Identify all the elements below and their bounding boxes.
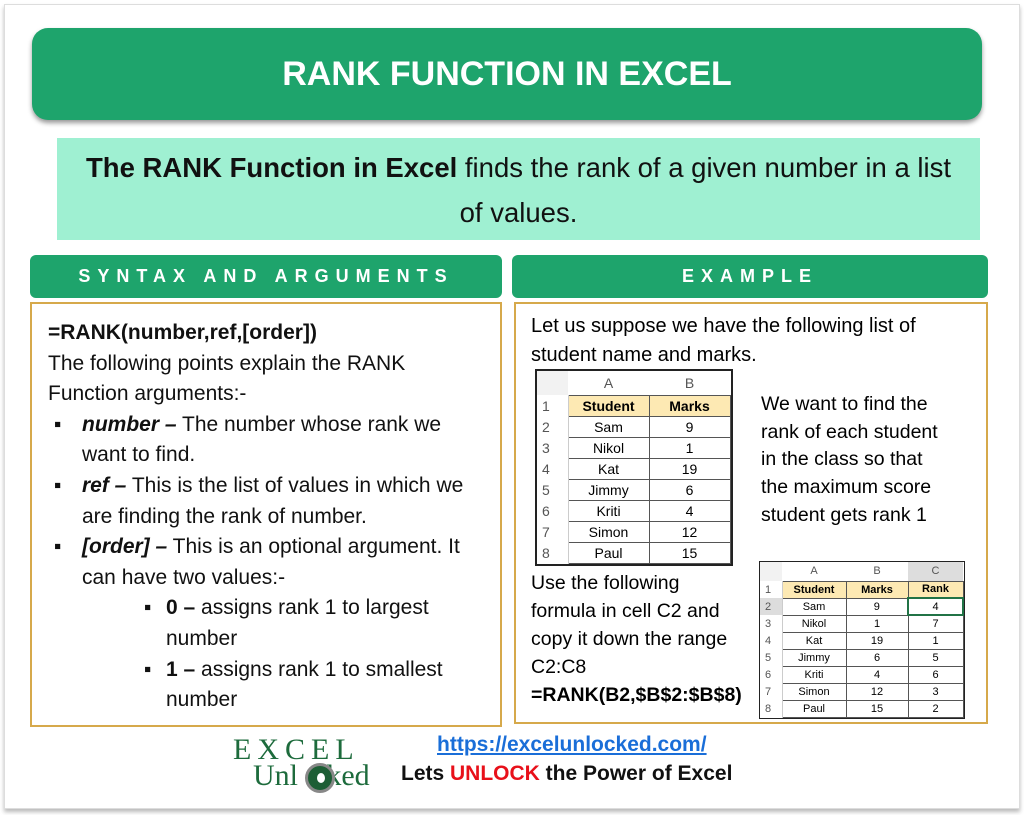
table: with rank: Kriti <box>805 668 823 680</box>
formula instruction: copy it down the range <box>531 628 727 650</box>
icon: lock <box>305 763 335 793</box>
argument list: ▪ <box>54 535 61 558</box>
table: student marks: 6 <box>542 502 550 518</box>
table: with rank: 1 <box>932 634 939 646</box>
table: student marks: B <box>685 375 694 391</box>
table: student marks <box>535 369 732 566</box>
table: student marks: 7 <box>542 524 550 540</box>
logo <box>233 733 370 793</box>
formula instruction: C2:C8 <box>531 656 586 678</box>
table: with rank: C <box>932 565 939 577</box>
definition band: The RANK Function in Excel finds the rank of a given number in a list <box>86 152 951 183</box>
table: with rank <box>759 561 965 718</box>
table: student marks: Simon <box>589 524 628 540</box>
table: student marks: 4 <box>542 460 550 476</box>
goal text <box>761 393 938 526</box>
table: with rank: 4 <box>932 600 939 612</box>
table: student marks: 1 <box>542 398 550 414</box>
table: with rank: 3 <box>932 686 939 698</box>
argument list: number <box>166 627 237 650</box>
table: student marks: 4 <box>686 502 693 518</box>
table: student marks: 12 <box>682 524 697 540</box>
table: student marks: Student <box>582 398 635 414</box>
table: student marks: Marks <box>669 398 710 414</box>
example intro <box>531 315 916 366</box>
table: with rank: 7 <box>932 618 939 630</box>
definition band <box>57 138 980 240</box>
table: student marks: A <box>604 375 613 391</box>
table: with rank: 15 <box>871 702 883 714</box>
header: example <box>512 255 988 298</box>
argument list <box>54 413 463 711</box>
explanation <box>48 352 405 405</box>
argument list: want to find. <box>82 443 195 466</box>
table: with rank: 1 <box>765 584 771 596</box>
argument list: ▪ <box>144 658 151 681</box>
table: with rank: 2 <box>765 600 771 612</box>
table: student marks: Paul <box>594 544 623 560</box>
tagline: Lets UNLOCK the Power of Excel <box>401 762 732 785</box>
table: student marks: 8 <box>542 544 550 560</box>
table: student marks: 2 <box>542 418 550 434</box>
table: with rank: Nikol <box>802 618 826 630</box>
table: with rank: 3 <box>765 618 771 630</box>
table: student marks: 19 <box>682 460 697 476</box>
formula instruction: =RANK(B2,$B$2:$B$8) <box>531 684 742 706</box>
argument list: 0 – assigns rank 1 to largest <box>166 596 429 619</box>
formula instruction: Use the following <box>531 572 680 594</box>
argument list: ref – This is the list of values in which we <box>82 474 463 497</box>
definition band: of values. <box>460 197 577 228</box>
table: with rank: 2 <box>932 702 939 714</box>
table: student marks: Kat <box>598 460 619 476</box>
table: student marks: 1 <box>686 440 693 456</box>
argument list: are finding the rank of number. <box>82 505 367 528</box>
argument list: can have two values:- <box>82 566 285 589</box>
table: with rank: 8 <box>765 702 771 714</box>
table: with rank: 6 <box>874 652 880 664</box>
table: student marks: 15 <box>682 544 697 560</box>
explanation: Function arguments:- <box>48 382 246 405</box>
title <box>32 28 982 120</box>
table: with rank: Simon <box>798 686 830 698</box>
table: with rank: 4 <box>874 668 880 680</box>
argument list: number – The number whose rank we <box>82 413 441 436</box>
table: with rank: 9 <box>874 600 880 612</box>
panel: example <box>514 302 988 724</box>
table: student marks: Kriti <box>596 502 621 518</box>
table: with rank: A <box>810 565 818 577</box>
formula instruction: formula in cell C2 and <box>531 600 720 622</box>
goal text: the maximum score <box>761 476 931 498</box>
table: with rank: 5 <box>932 652 939 664</box>
argument list: [order] – This is an optional argument. It <box>82 535 460 558</box>
table: with rank: 1 <box>874 618 880 630</box>
panel: syntax <box>30 302 502 727</box>
table: with rank: B <box>873 565 881 577</box>
table: with rank: 6 <box>932 668 939 680</box>
goal text: student gets rank 1 <box>761 504 927 526</box>
logo: Unlocked <box>253 759 370 792</box>
example intro: student name and marks. <box>531 344 757 366</box>
title: RANK FUNCTION IN EXCEL <box>282 55 732 93</box>
argument list: number <box>166 688 237 711</box>
table: with rank: Paul <box>803 702 825 714</box>
table: with rank: 19 <box>871 634 883 646</box>
table: with rank: Rank <box>922 583 949 595</box>
argument list: 1 – assigns rank 1 to smallest <box>166 658 443 681</box>
goal text: rank of each student <box>761 421 938 443</box>
website url: https://excelunlocked.com/ <box>437 733 707 756</box>
header: syntax: SYNTAX AND ARGUMENTS <box>78 266 454 286</box>
table: student marks: Nikol <box>593 440 624 456</box>
table: student marks: 3 <box>542 440 550 456</box>
argument list: ▪ <box>54 474 61 497</box>
argument list: ▪ <box>144 596 151 619</box>
goal text: in the class so that <box>761 448 923 470</box>
header: example: EXAMPLE <box>682 266 818 286</box>
table: with rank: Jimmy <box>798 652 830 664</box>
table: with rank: 6 <box>765 668 771 680</box>
table: with rank: 12 <box>871 686 883 698</box>
table: student marks: Jimmy <box>588 482 629 498</box>
header: syntax <box>30 255 502 298</box>
table: with rank: Sam <box>803 600 825 612</box>
table: with rank: 4 <box>765 634 771 646</box>
syntax formula: =RANK(number,ref,[order]) <box>48 321 317 344</box>
table: with rank: 7 <box>765 686 771 698</box>
table: with rank: Marks <box>861 584 893 596</box>
logo: EXCEL <box>233 733 360 766</box>
formula instruction <box>531 572 742 706</box>
table: student marks: Sam <box>594 418 623 434</box>
table: with rank: Kat <box>806 634 822 646</box>
table: with rank: Student <box>794 584 834 596</box>
explanation: The following points explain the RANK <box>48 352 405 375</box>
goal text: We want to find the <box>761 393 928 415</box>
table: student marks: 5 <box>542 482 550 498</box>
table: student marks: 9 <box>686 418 693 434</box>
table: student marks: 6 <box>686 482 693 498</box>
table: with rank: 5 <box>765 652 771 664</box>
example intro: Let us suppose we have the following list of <box>531 315 916 337</box>
argument list: ▪ <box>54 413 61 436</box>
